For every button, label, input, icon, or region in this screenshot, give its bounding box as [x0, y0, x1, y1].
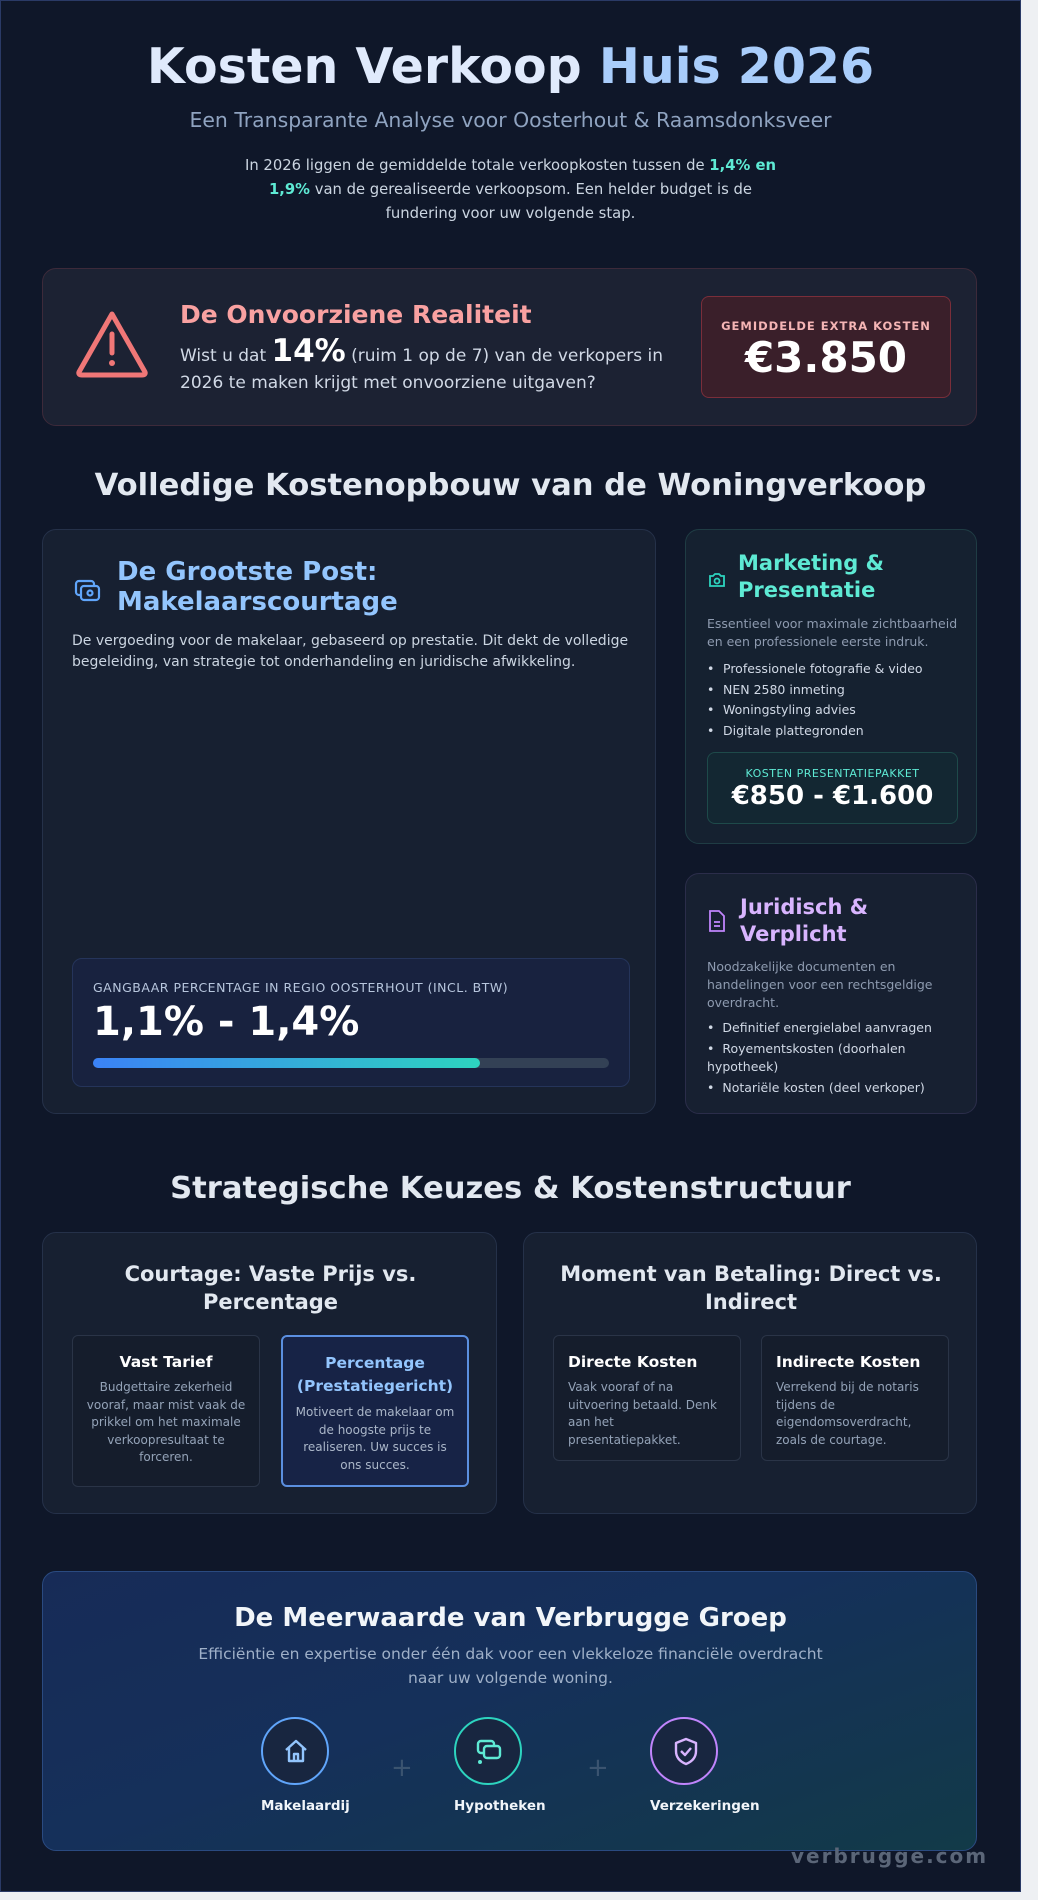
list: Royementskosten (doorhalen hypotheek) [707, 1041, 906, 1074]
callout: extra kosten: €3.850 [745, 333, 907, 382]
panel: juridisch [685, 873, 977, 1114]
panel: courtage [42, 1232, 497, 1514]
heading: Moment van Betaling: Direct vs. [560, 1262, 942, 1286]
heading: Indirect [705, 1290, 797, 1314]
card: indirecte kosten: Indirecte Kosten [776, 1353, 920, 1371]
icon: makelaardij [261, 1717, 350, 1814]
heading: Juridisch & [740, 895, 868, 919]
icon: makelaardij: Makelaardij [261, 1798, 350, 1814]
heading [117, 557, 398, 617]
icon: verzekeringen: Verzekeringen [650, 1798, 760, 1814]
title: Kosten Verkoop Huis 2026 [147, 38, 874, 95]
heading: Courtage: Vaste Prijs vs. [125, 1262, 416, 1286]
panel: alert [42, 268, 977, 426]
list: Woningstyling advies [723, 702, 856, 717]
panel: makelaarscourtage [42, 529, 656, 1114]
heading [738, 895, 868, 946]
heading: Percentage [203, 1290, 338, 1314]
price box: KOSTEN PRESENTATIEPAKKET [745, 767, 920, 780]
icon: money [74, 580, 100, 602]
card: indirecte kosten [761, 1335, 949, 1461]
card: indirecte kosten: Verrekend bij de notaris tijdens de eigendomsoverdracht, zoals de courtage. [776, 1380, 919, 1446]
alert heading: De Onvoorziene Realiteit [180, 300, 532, 329]
icon: hypotheken: Hypotheken [454, 1798, 546, 1814]
icon: warning [76, 312, 148, 378]
icon: verzekeringen [650, 1717, 760, 1814]
description: Essentieel voor maximale zichtbaarheid en een professionele eerste indruk. [707, 616, 957, 649]
card: percentage: Motiveert de makelaar om de hoogste prijs te realiseren. Uw succes is ons succes. [296, 1405, 454, 1472]
list: Notariële kosten (deel verkoper) [722, 1080, 925, 1095]
heading: kostenopbouw: Volledige Kostenopbouw van de Woningverkoop [95, 468, 926, 503]
card: percentage [281, 1335, 469, 1487]
list: Definitief energielabel aanvragen [722, 1020, 932, 1035]
panel: moment van betaling [523, 1232, 977, 1514]
progress bar [93, 1058, 609, 1068]
alert text: Wist u dat 14% (ruim 1 op de 7) van de verkopers in 2026 te maken krijgt met onvoorziene uitgaven? [180, 333, 663, 393]
heading: Verplicht [740, 922, 847, 946]
price box [707, 752, 958, 824]
icon: hypotheken [454, 1717, 546, 1814]
icon: document [709, 910, 725, 932]
heading [738, 551, 884, 602]
list [708, 661, 923, 738]
icon: camera [709, 573, 725, 587]
card: vast tarief: Vast Tarief [120, 1353, 212, 1371]
footer: brand: verbrugge.com [791, 1844, 988, 1868]
list: Digitale plattegronden [723, 722, 864, 738]
plus: + [391, 1753, 413, 1783]
card: vast tarief [72, 1335, 260, 1487]
callout: extra kosten: GEMIDDELDE EXTRA KOSTEN [721, 319, 931, 333]
heading: strategische keuzes: Strategische Keuzes & Kostenstructuur [170, 1171, 851, 1206]
panel: meerwaarde [42, 1571, 977, 1851]
plus: + [587, 1753, 609, 1783]
price box: €850 - €1.600 [732, 781, 933, 811]
heading: De Meerwaarde van Verbrugge Groep [234, 1603, 787, 1633]
list: Professionele fotografie & video [723, 661, 923, 676]
heading [560, 1262, 942, 1314]
card: directe kosten: Vaak vooraf of na uitvoering betaald. Denk aan het presentatiepakket. [568, 1380, 717, 1446]
intro text: In 2026 liggen de gemiddelde totale verkoopkosten tussen de 1,4% en 1,9% van de gerealiseerde verkoopsom. Een helder budget is de fundering voor uw volgende stap. [245, 157, 776, 222]
heading: De Grootste Post: [117, 557, 377, 587]
heading: Presentatie [738, 578, 875, 602]
heading: Makelaarscourtage [117, 587, 398, 617]
subtitle: Efficiëntie en expertise onder één dak voor een vlekkeloze financiële overdracht naar uw volgende woning. [198, 1645, 823, 1687]
stat box: percentage: GANGBAAR PERCENTAGE IN REGIO OOSTERHOUT (INCL. BTW) [93, 980, 508, 995]
card: directe kosten: Directe Kosten [568, 1353, 697, 1371]
panel: marketing [685, 529, 977, 844]
heading [125, 1262, 416, 1314]
card: percentage: Percentage (Prestatiegericht) [297, 1354, 453, 1395]
subtitle: Een Transparante Analyse voor Oosterhout & Raamsdonksveer [189, 108, 832, 132]
callout: extra kosten [701, 296, 951, 398]
list: NEN 2580 inmeting [723, 682, 845, 696]
card: vast tarief: Budgettaire zekerheid vooraf, maar mist vaak de prikkel om het maximale verkoopresultaat te forceren. [87, 1380, 245, 1464]
list [707, 1020, 932, 1095]
heading: Marketing & [738, 551, 884, 575]
stat box: percentage [72, 958, 630, 1087]
description: De vergoeding voor de makelaar, gebaseerd op prestatie. Dit dekt de volledige begeleiding, van strategie tot onderhandeling en juridische afwikkeling. [72, 633, 628, 670]
stat box: percentage: 1,1% - 1,4% [93, 999, 359, 1045]
card: directe kosten [553, 1335, 741, 1461]
description: Noodzakelijke documenten en handelingen voor een rechtsgeldige overdracht. [707, 959, 932, 1010]
